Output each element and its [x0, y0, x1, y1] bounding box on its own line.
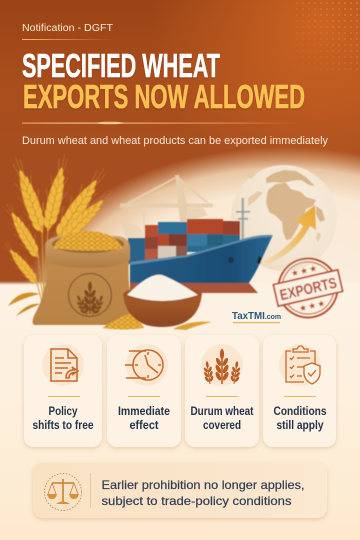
subtitle: Durum wheat and wheat products can be exported immediately — [22, 135, 329, 147]
crane — [120, 175, 213, 244]
title — [22, 47, 305, 115]
card: conditions still apply: Conditions — [274, 406, 326, 418]
exports stamp: EXPORTS — [278, 275, 339, 304]
exports stamp — [269, 252, 347, 324]
arrow — [264, 205, 316, 264]
exports stamp: ★ ★ ★ — [290, 264, 318, 278]
card: durum wheat covered: covered — [203, 420, 241, 432]
card: policy shifts to free — [24, 335, 102, 447]
card: immediate effect — [107, 335, 181, 447]
spilled grains — [102, 313, 212, 330]
card: durum wheat covered — [185, 335, 259, 447]
ship hull — [130, 235, 273, 293]
icon: checklist with shield — [286, 346, 320, 384]
dot pattern top right — [295, 0, 360, 70]
card: conditions still apply: still apply — [276, 420, 324, 432]
title: SPECIFIED WHEAT — [22, 47, 220, 84]
hero illustration — [0, 152, 347, 330]
card: conditions still apply — [263, 335, 336, 447]
exports stamp: ★ ★ ★ — [298, 299, 326, 313]
eyebrow: notification label: Notification - DGFT — [22, 22, 114, 34]
card: policy shifts to free: Policy — [48, 406, 78, 418]
containers — [128, 219, 240, 264]
card: immediate effect: Immediate — [118, 406, 170, 418]
icon: wheat — [202, 349, 242, 385]
eyebrow: notification label — [22, 22, 114, 40]
wheat stalks — [0, 152, 118, 316]
callout bar — [33, 463, 327, 518]
card: immediate effect: effect — [130, 420, 159, 432]
callout bar: Earlier prohibition no longer applies, — [102, 478, 304, 492]
icon: scales of justice — [44, 474, 82, 510]
card: durum wheat covered: Durum wheat — [190, 406, 254, 418]
icon: policy document — [51, 349, 78, 381]
flour bowl — [123, 275, 202, 327]
card: policy shifts to free: shifts to free — [32, 420, 94, 432]
mast — [236, 198, 250, 250]
globe — [231, 165, 337, 271]
grain sack — [33, 231, 134, 325]
divider with glow — [22, 122, 302, 124]
icon: fast clock — [125, 350, 163, 380]
callout bar: subject to trade-policy conditions — [102, 494, 292, 508]
brand logo: TaxTMI.com — [232, 310, 281, 322]
